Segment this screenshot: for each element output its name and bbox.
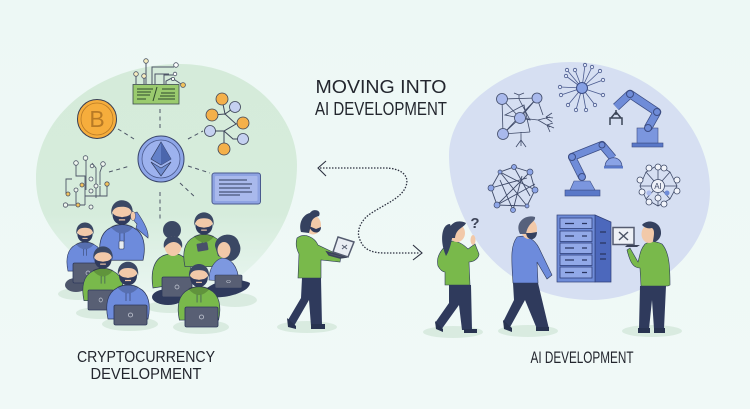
icon: server rack <box>557 215 611 282</box>
icon: blue code panel <box>212 173 260 204</box>
icon: robot arm gripper <box>610 90 663 147</box>
title: MOVING INTO <box>316 76 446 97</box>
icon: green code card with circuit <box>133 59 185 104</box>
icon: AI chip network <box>637 164 680 207</box>
icon: AI chip network: AI <box>654 182 662 191</box>
title: AI DEVELOPMENT <box>315 98 447 119</box>
arrow: dotted path between fields <box>318 161 422 260</box>
icon: radial neural burst <box>558 63 605 112</box>
person: man in blue hoodie walking <box>498 216 558 337</box>
person: walking developer with laptop <box>277 210 354 333</box>
person: blue developer front <box>107 262 149 325</box>
label: AI development: AI DEVELOPMENT <box>530 348 634 367</box>
label: cryptocurrency development: CRYPTOCURRENCY <box>77 349 215 366</box>
icon: circuit traces <box>63 156 109 209</box>
icon: bitcoin coin: B <box>89 106 105 132</box>
person: man with laptop <box>613 222 682 337</box>
panel: blue blob <box>449 62 710 300</box>
ground shadows <box>58 288 257 334</box>
label: cryptocurrency development: DEVELOPMENT <box>90 366 202 383</box>
person: green developer front <box>178 264 220 327</box>
person: developer on phone <box>100 200 148 260</box>
icon: neural network polygon <box>496 93 554 147</box>
person: woman thinking: ? <box>470 215 480 232</box>
person: curly hair woman <box>207 235 250 297</box>
title <box>315 76 447 119</box>
icon: token network <box>204 93 249 155</box>
icon: woven network <box>488 164 538 212</box>
label: cryptocurrency development <box>77 349 215 383</box>
panel: crypto developer team <box>58 200 257 334</box>
panel: AI technologies <box>488 63 680 282</box>
icon: ethereum coin <box>138 136 184 182</box>
person: green developer left <box>83 246 123 310</box>
panel: green blob <box>36 64 297 294</box>
icon: bitcoin coin <box>78 100 116 138</box>
connector dashes <box>109 109 210 221</box>
person: standing man with phone <box>184 212 224 267</box>
panel: cryptocurrency network <box>63 59 260 221</box>
icon: robot arm with claw <box>565 142 623 196</box>
person: woman with bun <box>152 221 192 305</box>
person: back left developer <box>65 222 103 292</box>
person: woman thinking <box>423 215 483 338</box>
